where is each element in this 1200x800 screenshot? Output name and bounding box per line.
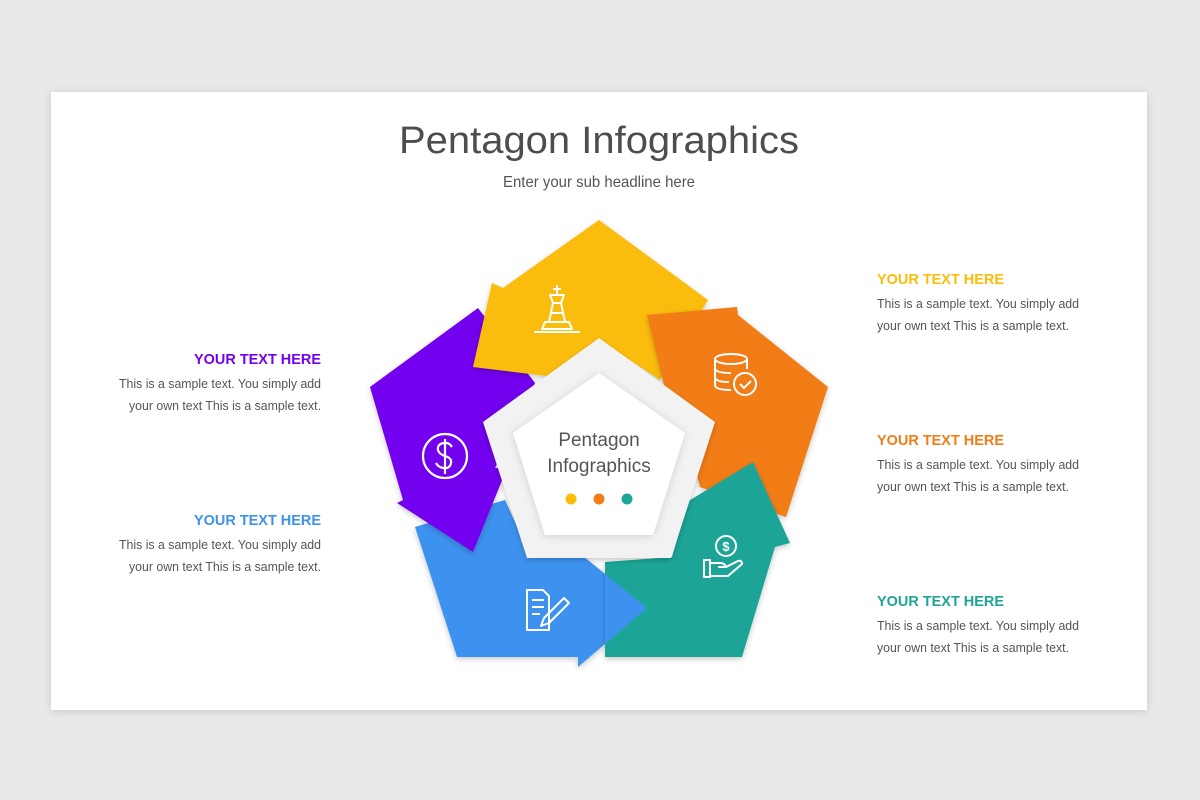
- arrow: blue: [415, 500, 647, 667]
- text: blue: [119, 512, 321, 574]
- text: blue: This is a sample text. You simply add: [119, 538, 321, 552]
- pentagon diagram: Infographics: [547, 456, 651, 477]
- text: teal: your own text This is a sample text.: [877, 641, 1069, 655]
- center pentagon outer ring: [483, 338, 715, 558]
- icon: document pen: [527, 590, 569, 630]
- center label: Pentagon: [558, 430, 640, 451]
- text: orange: [877, 432, 1079, 494]
- text: orange: This is a sample text. You simply add: [877, 458, 1079, 472]
- icon: dollar circle: [423, 434, 467, 478]
- text: orange: YOUR TEXT HERE: [877, 432, 1004, 449]
- text: yellow: This is a sample text. You simply add: [877, 297, 1079, 311]
- card: [51, 92, 1147, 710]
- icon: database check: [715, 354, 756, 395]
- dots: [566, 494, 632, 504]
- text: purple: YOUR TEXT HERE: [194, 351, 321, 368]
- center pentagon inner: [513, 373, 685, 535]
- icon: coin in hand: [704, 536, 742, 577]
- arrow: yellow: [473, 220, 708, 380]
- arrow: orange: [647, 307, 828, 517]
- text: teal: YOUR TEXT HERE: [877, 593, 1004, 610]
- subtitle: Enter your sub headline here: [503, 174, 695, 191]
- pentagon diagram: [370, 220, 828, 667]
- text: teal: [877, 593, 1079, 655]
- arrow: teal: [605, 462, 790, 657]
- arrow: purple: [370, 308, 535, 552]
- icon: chess king: [534, 285, 580, 332]
- text: yellow: YOUR TEXT HERE: [877, 271, 1004, 288]
- text: blue: YOUR TEXT HERE: [194, 512, 321, 529]
- text: yellow: [877, 271, 1079, 333]
- text: purple: [119, 351, 321, 413]
- text: purple: This is a sample text. You simply add: [119, 377, 321, 391]
- icon: coin in hand: $: [722, 539, 730, 554]
- title: Pentagon Infographics: [399, 120, 799, 162]
- text: yellow: your own text This is a sample text.: [877, 319, 1069, 333]
- text: blue: your own text This is a sample text.: [129, 560, 321, 574]
- text: teal: This is a sample text. You simply add: [877, 619, 1079, 633]
- text: orange: your own text This is a sample text.: [877, 480, 1069, 494]
- arrow: blue tip overlap: [605, 574, 647, 644]
- text: purple: your own text This is a sample text.: [129, 399, 321, 413]
